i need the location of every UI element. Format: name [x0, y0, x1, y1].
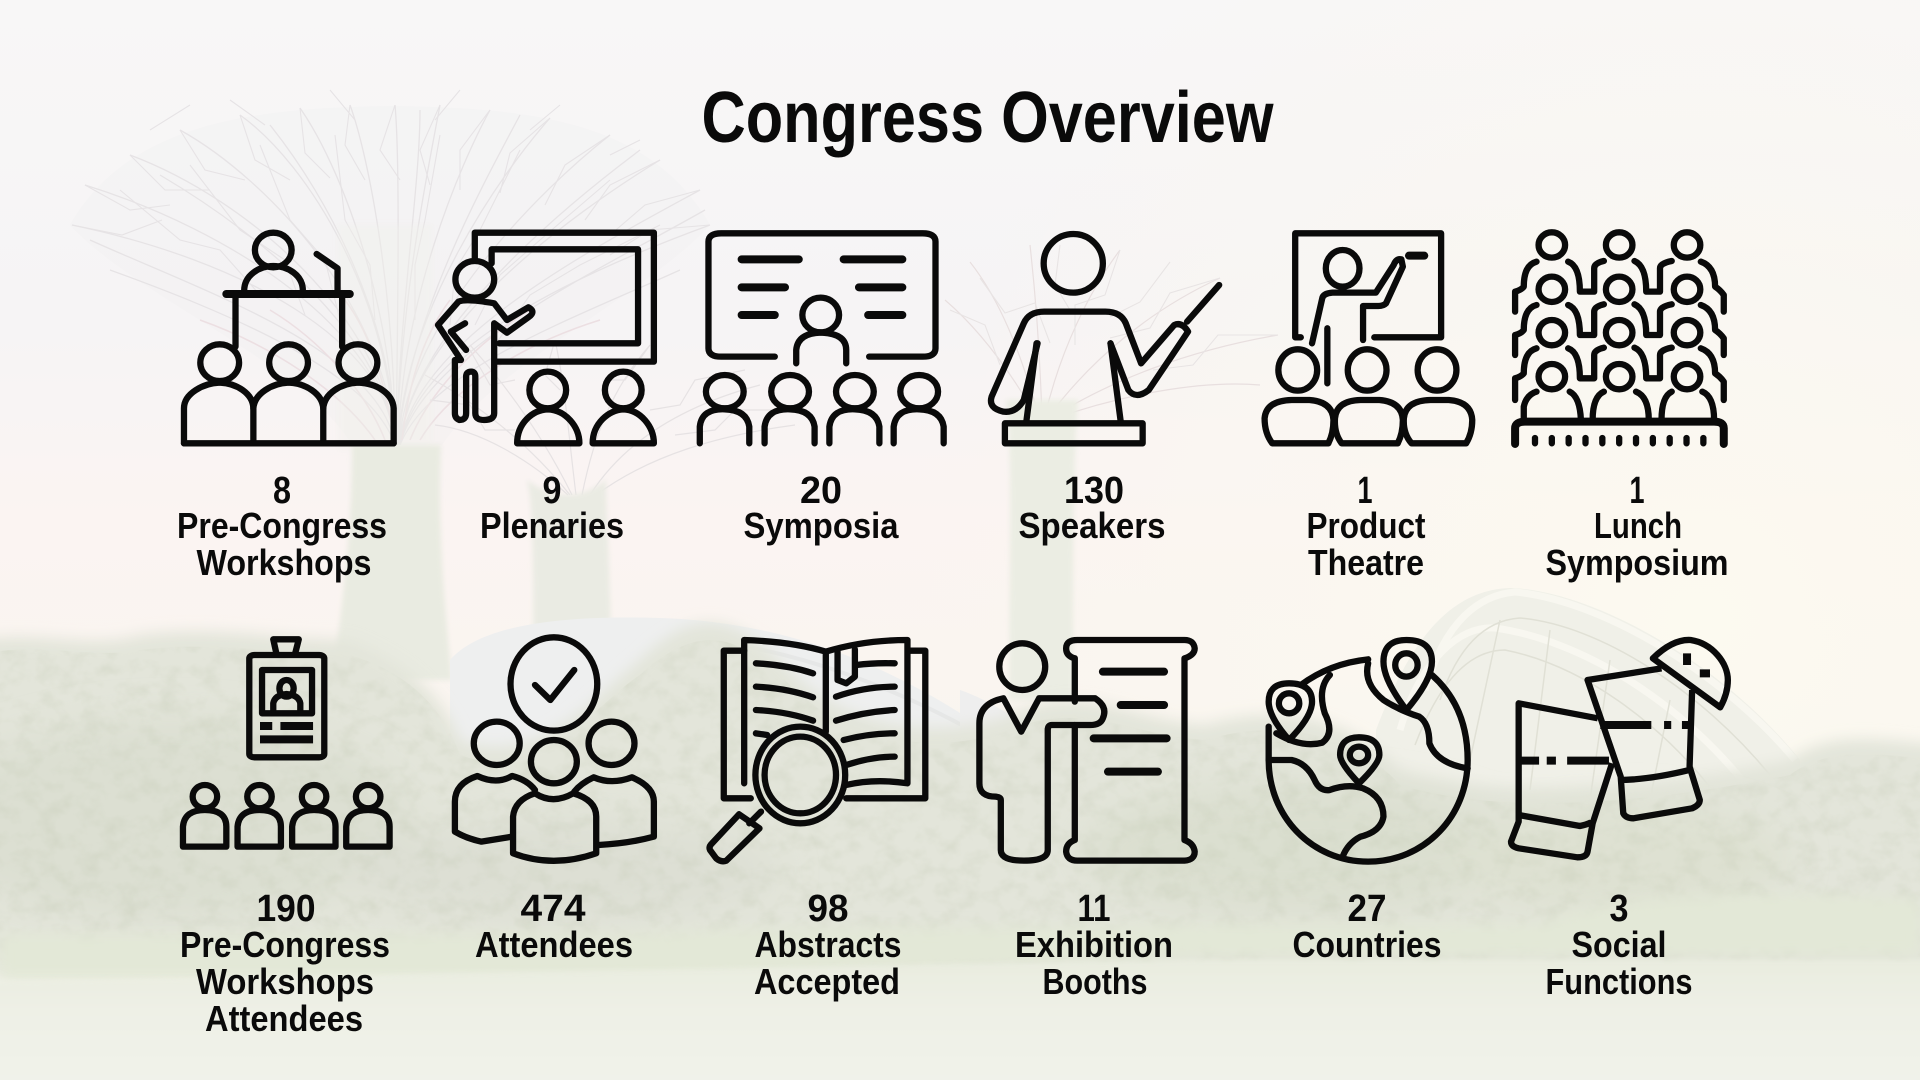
- background: supertree canopies: [70, 90, 1278, 495]
- label: 474 attendees: Attendees: [475, 924, 633, 965]
- label: 1 product theatre: [1306, 470, 1426, 583]
- label: 1 product theatre: Product: [1306, 505, 1426, 546]
- label: 3 social functions: 3: [1610, 888, 1628, 930]
- label: 1 lunch symposium: Symposium: [1546, 542, 1728, 583]
- stat: lunch symposium: [1515, 232, 1728, 583]
- stat: product theatre: [1265, 233, 1472, 583]
- label: 8 pre-congress workshops: 8: [273, 470, 291, 512]
- stat: speakers: [991, 234, 1219, 546]
- label: 20 symposia: 20: [800, 470, 842, 512]
- label: 9 plenaries: [480, 470, 624, 546]
- label: 11 exhibition booths: 11: [1078, 888, 1110, 930]
- label: 1 lunch symposium: 1: [1630, 470, 1644, 512]
- icon: seated lecture hall audience: [1515, 232, 1724, 444]
- stat: pre-congress workshops: [177, 233, 394, 583]
- label: 27 countries: 27: [1348, 888, 1386, 930]
- stat: social functions: [1511, 640, 1728, 1002]
- label: 27 countries: [1292, 888, 1442, 965]
- label: 11 exhibition booths: [1015, 888, 1173, 1002]
- label: 1 product theatre: 1: [1358, 470, 1372, 512]
- stat: countries: [1269, 640, 1468, 965]
- icon: screen with speaker and audience: [700, 233, 944, 443]
- stat: attendees: [455, 637, 654, 965]
- label: 8 pre-congress workshops: [177, 470, 387, 583]
- label: 3 social functions: Social: [1572, 924, 1666, 965]
- stat: pre-congress workshops attendees: [180, 639, 390, 1039]
- background: conservatory domes: [450, 588, 1800, 830]
- background: forest band: [0, 623, 1920, 975]
- icon: open book with magnifier: [710, 640, 925, 861]
- label: 8 pre-congress workshops: Pre-Congress: [177, 505, 387, 546]
- label: 20 symposia: [744, 470, 899, 546]
- label: 98 abstracts accepted: [754, 888, 902, 1002]
- icon: two clinking glasses with lime: [1511, 640, 1728, 857]
- icon: presenter at board with seated audience: [1265, 233, 1472, 443]
- label: 27 countries: Countries: [1292, 924, 1442, 965]
- stat: exhibition booths: [979, 640, 1195, 1002]
- icon: group with check mark: [455, 637, 654, 861]
- label: 3 social functions: [1546, 888, 1692, 1002]
- icon: presenter at board: [438, 233, 654, 443]
- label: 130 speakers: 130: [1064, 470, 1124, 512]
- icon: person beside exhibition banner: [979, 640, 1195, 861]
- label: 20 symposia: Symposia: [744, 505, 899, 546]
- icon: badge with four people: [183, 639, 390, 847]
- label: 1 product theatre: Theatre: [1308, 542, 1424, 583]
- stat: symposia: [700, 233, 944, 546]
- label: 3 social functions: Functions: [1546, 961, 1692, 1002]
- icon: speaker with pointer: [991, 234, 1219, 443]
- label: 474 attendees: 474: [520, 888, 586, 930]
- stat: plenaries: [438, 233, 654, 546]
- stat: abstracts accepted: [710, 640, 925, 1002]
- label: 190 pre-congress workshops attendees: 190: [256, 888, 316, 930]
- label: 1 lunch symposium: Lunch: [1594, 505, 1682, 546]
- label: 98 abstracts accepted: Accepted: [754, 961, 900, 1002]
- label: 130 speakers: Speakers: [1018, 505, 1166, 546]
- label: 98 abstracts accepted: 98: [808, 888, 848, 930]
- label: 98 abstracts accepted: Abstracts: [754, 924, 902, 965]
- label: 190 pre-congress workshops attendees: Workshops: [196, 961, 374, 1002]
- label: 190 pre-congress workshops attendees: Attendees: [205, 998, 363, 1039]
- icon: speaker at podium with audience: [184, 233, 394, 443]
- title: Congress Overview: [702, 78, 1274, 158]
- background: trunks: [332, 225, 1078, 700]
- label: 190 pre-congress workshops attendees: Pre-Congress: [180, 924, 390, 965]
- icon: globe with location pins: [1269, 640, 1468, 862]
- label: 11 exhibition booths: Exhibition: [1015, 924, 1173, 965]
- background: lake reflection: [0, 960, 1920, 1080]
- label: 9 plenaries: 9: [542, 470, 562, 512]
- label: 190 pre-congress workshops attendees: [180, 888, 390, 1039]
- label: 9 plenaries: Plenaries: [480, 505, 624, 546]
- label: 1 lunch symposium: [1546, 470, 1728, 583]
- label: 11 exhibition booths: Booths: [1042, 961, 1148, 1002]
- label: 474 attendees: [475, 888, 633, 965]
- label: 8 pre-congress workshops: Workshops: [196, 542, 372, 583]
- background: grass bank: [0, 894, 1920, 980]
- label: 130 speakers: [1018, 470, 1166, 546]
